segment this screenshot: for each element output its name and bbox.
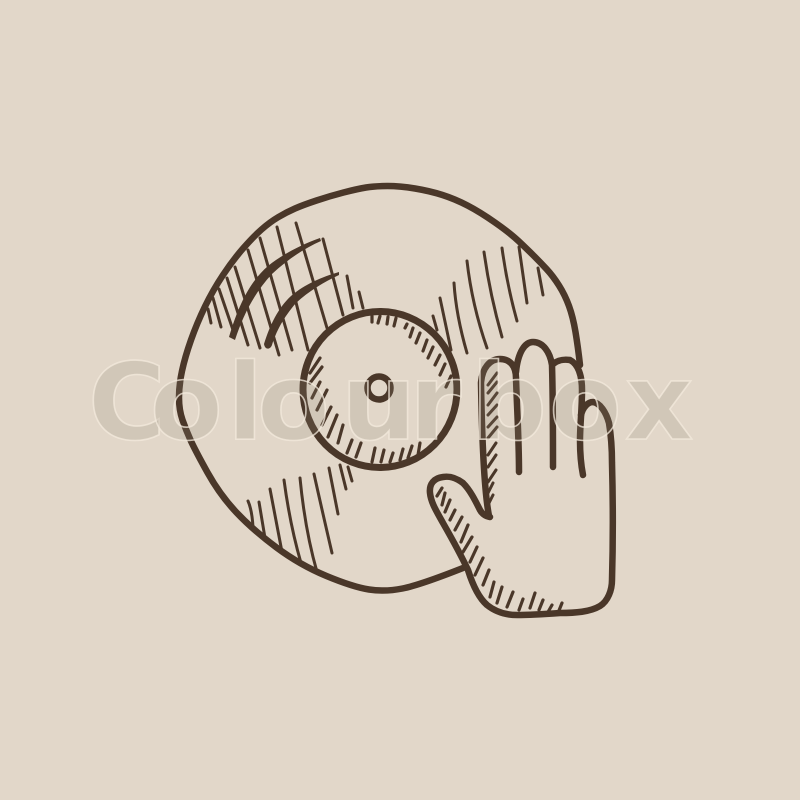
- groove upper: [229, 238, 321, 340]
- hatching: upper left of record: [208, 223, 363, 355]
- palm and thumb hatching: [437, 488, 562, 613]
- record outer edge: [179, 186, 580, 591]
- index finger: [481, 359, 519, 516]
- spindle hole: [368, 376, 390, 400]
- record grooves highlight: [229, 238, 339, 349]
- label hatching: [310, 316, 451, 462]
- index finger hatching: [488, 373, 497, 505]
- record label ring: [303, 312, 457, 468]
- watermark text: Colourbox: [88, 341, 693, 464]
- hatching: upper right of record: [433, 247, 543, 353]
- ring finger and pinky divider: [553, 360, 583, 475]
- hand outline: [430, 402, 613, 615]
- middle finger: [516, 342, 553, 467]
- hatching: lower left of record: [248, 465, 352, 572]
- icon: vinyl record with DJ hand: [179, 186, 613, 615]
- groove lower: [264, 272, 339, 349]
